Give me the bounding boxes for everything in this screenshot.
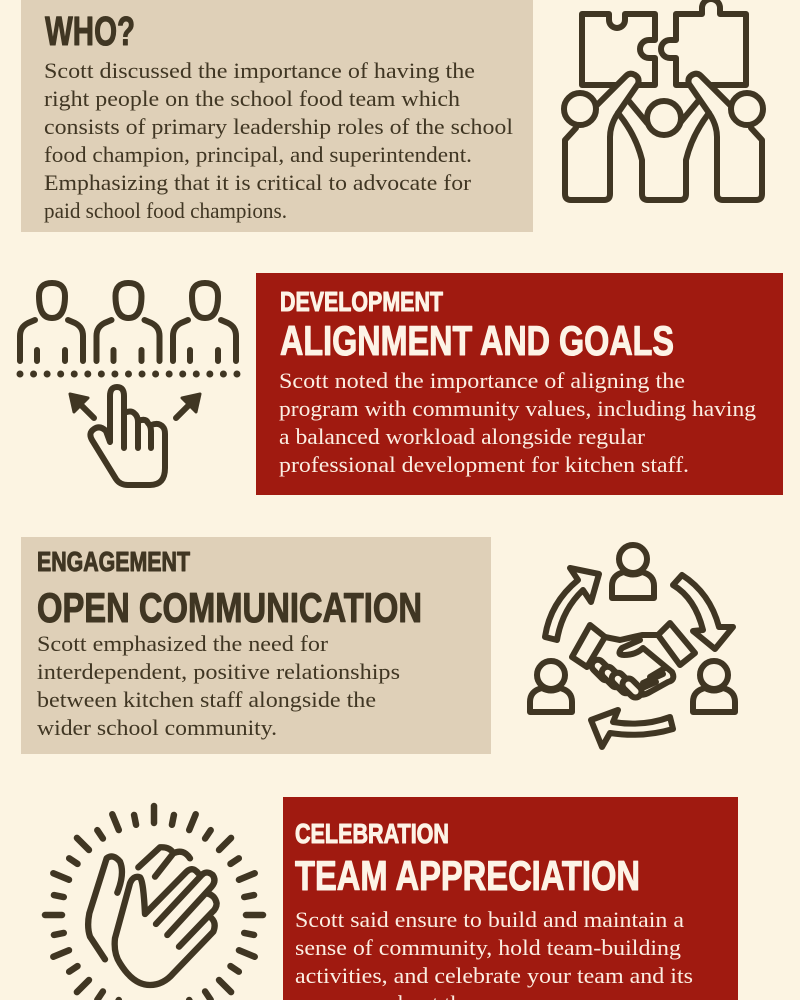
text block: appreciation — [295, 907, 693, 1000]
text block: appreciation: activities, and celebrate your team and its — [295, 963, 693, 988]
text block: communication — [37, 631, 400, 740]
text block: alignment — [279, 368, 756, 477]
text block: appreciation: Scott said ensure to build and maintain a — [295, 907, 684, 932]
icon: hand choosing people — [20, 283, 237, 485]
text block: appreciation: sense of community, hold team-building — [295, 935, 681, 960]
panel: team appreciation — [283, 797, 738, 1000]
hand — [90, 387, 165, 485]
subheading: development: DEVELOPMENT — [280, 286, 443, 317]
panel: open communication — [21, 537, 491, 754]
text block: who: food champion, principal, and superintendent. — [44, 142, 472, 167]
text block: who: right people on the school food team which — [44, 86, 460, 111]
person top — [612, 545, 654, 598]
text block: communication: wider school community. — [37, 715, 277, 740]
handshake — [572, 623, 695, 700]
icon: clapping hands with rays — [45, 806, 263, 1000]
text block: who: paid school food champions. — [44, 198, 287, 223]
panel: who — [21, 0, 533, 232]
text block: alignment: Scott noted the importance of aligning the — [279, 368, 685, 393]
text block: alignment: program with community values, including having — [279, 396, 756, 421]
person right — [693, 661, 735, 712]
person 3 — [173, 283, 236, 361]
text block: who: consists of primary leadership roles of the school — [44, 114, 513, 139]
heading: who: WHO? — [45, 8, 135, 54]
dotted line — [20, 370, 237, 378]
text block: who — [44, 58, 513, 223]
arrow: right — [176, 394, 200, 418]
text block: communication: interdependent, positive relationships — [37, 659, 400, 684]
icon: team holding puzzle pieces — [564, 0, 763, 200]
person 2 — [96, 283, 160, 361]
arrow: upper right — [673, 575, 733, 649]
subheading: celebration: CELEBRATION — [295, 818, 449, 849]
arrow: left — [70, 394, 94, 418]
person left — [530, 661, 572, 712]
heading: alignment and goals: ALIGNMENT AND GOALS — [280, 317, 674, 364]
text block: who: Emphasizing that it is critical to advocate for — [44, 170, 472, 195]
text block: alignment: professional development for kitchen staff. — [279, 452, 689, 477]
text block: communication: Scott emphasized the need for — [37, 631, 329, 656]
text block: communication: between kitchen staff alongside the — [37, 687, 376, 712]
text block: alignment: a balanced workload alongside regular — [279, 424, 646, 449]
arrow: bottom — [591, 710, 673, 747]
icon: handshake with people and cycle arrows — [530, 545, 735, 747]
arrow: upper left — [545, 568, 599, 640]
person 1 — [20, 283, 83, 361]
rays — [45, 806, 263, 1000]
heading: open communication: OPEN COMMUNICATION — [37, 584, 422, 631]
panel: alignment and goals — [256, 273, 783, 495]
text block: who: Scott discussed the importance of having the — [44, 58, 475, 83]
clapping hands — [88, 847, 217, 985]
subheading: engagement: ENGAGEMENT — [37, 546, 190, 577]
heading: team appreciation: TEAM APPRECIATION — [295, 852, 640, 899]
